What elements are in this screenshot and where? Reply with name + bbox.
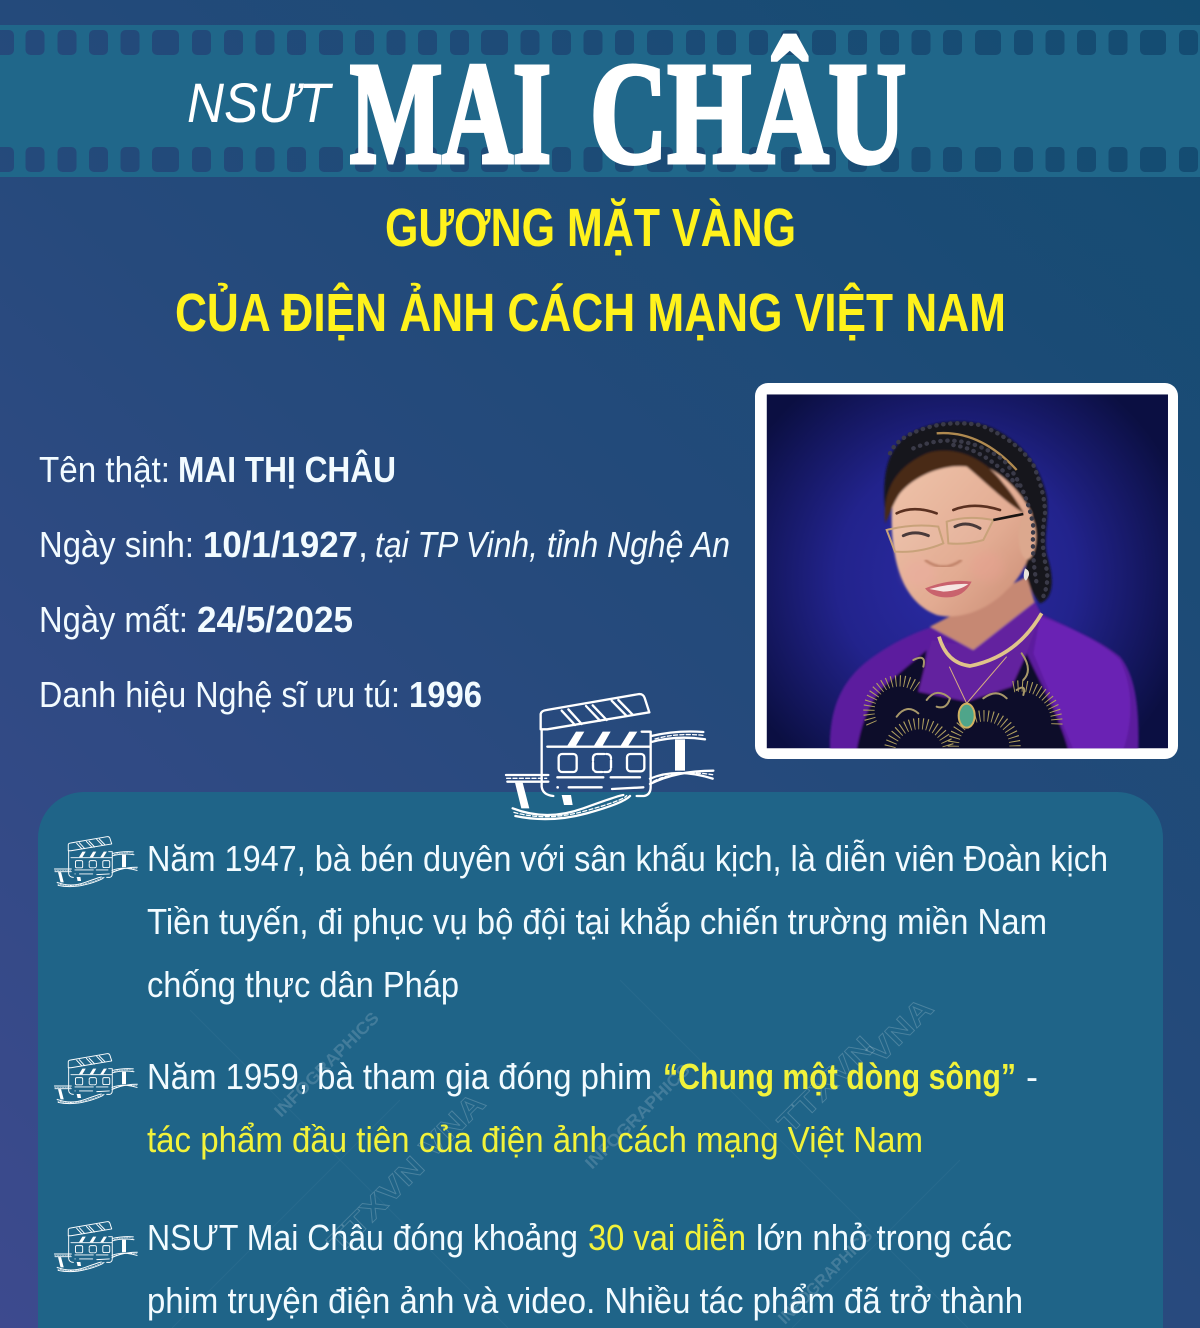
subtitle heading: GƯƠNG MẶT VÀNG: [385, 198, 796, 258]
bullet 2: “Chung một dòng sông”: [663, 1056, 1016, 1097]
watermarks: [172, 980, 968, 1328]
bullet 1: [54, 837, 1108, 1005]
biography facts: tại TP Vinh, tỉnh Nghệ An: [375, 524, 730, 565]
title: MAI CHÂU: CHÂU: [590, 34, 906, 194]
bullet icon 2: [54, 1054, 137, 1104]
title: MAI CHÂU: [350, 34, 906, 194]
biography facts: Tên thật:: [39, 449, 170, 490]
biography facts: 1996: [409, 674, 482, 715]
bullet 2: tác phẩm đầu tiên của điện ảnh cách mạng Việt Nam: [147, 1119, 923, 1160]
header film strip: [0, 25, 1200, 177]
bullet 2: [54, 1054, 1038, 1160]
bullet 3: phim truyện điện ảnh và video. Nhiều tác phẩm đã trở thành: [147, 1280, 1023, 1321]
biography facts: 10/1/1927: [203, 524, 358, 565]
hair curls: [890, 423, 1047, 600]
biography facts: Ngày sinh:: [39, 524, 194, 565]
bullet 1: Tiền tuyến, đi phục vụ bộ đội tại khắp chiến trường miền Nam: [147, 901, 1047, 942]
title: MAI CHÂU: MAI: [350, 34, 551, 194]
biography facts: MAI THỊ CHÂU: [178, 448, 396, 490]
bullet 3: NSƯT Mai Châu đóng khoảng: [147, 1217, 578, 1258]
subtitle heading: [175, 198, 1006, 343]
bullet 3: 30 vai diễn: [588, 1217, 746, 1258]
watermarks: VNA: [414, 1086, 492, 1165]
bullet 2: Năm 1959, bà tham gia đóng phim: [147, 1056, 652, 1097]
content panel: [38, 792, 1163, 1328]
biography facts: 24/5/2025: [197, 599, 353, 640]
title: NSƯT: NSƯT: [187, 71, 333, 134]
bullet 3: [54, 1217, 1023, 1321]
bullet 3: lớn nhỏ trong các: [756, 1217, 1012, 1258]
bullet 1: chống thực dân Pháp: [147, 964, 459, 1005]
bullet icon 1: [54, 837, 137, 887]
bullet 1: Năm 1947, bà bén duyên với sân khấu kịch, là diễn viên Đoàn kịch: [147, 838, 1108, 879]
bullet icon 3: [54, 1222, 137, 1272]
watermarks: INFOGRAPHICS: [581, 1060, 694, 1173]
biography facts: ,: [358, 524, 368, 565]
biography facts: Danh hiệu Nghệ sĩ ưu tú:: [39, 674, 400, 715]
subtitle heading: CỦA ĐIỆN ẢNH CÁCH MẠNG VIỆT NAM: [175, 282, 1006, 343]
icon: clapperboard with film strip: [506, 694, 713, 819]
watermarks: VNA: [862, 991, 940, 1070]
biography facts: Ngày mất:: [39, 599, 188, 640]
watermarks: INFOGRAPHICS: [774, 1226, 876, 1328]
bullet 2: -: [1026, 1056, 1038, 1097]
biography facts: [39, 448, 730, 715]
watermarks: INFOGRAPHICS: [270, 1008, 383, 1121]
watermarks: TTXVN: [322, 1150, 431, 1260]
watermarks: TTXVN: [772, 1030, 881, 1140]
portrait photo: [755, 383, 1178, 759]
